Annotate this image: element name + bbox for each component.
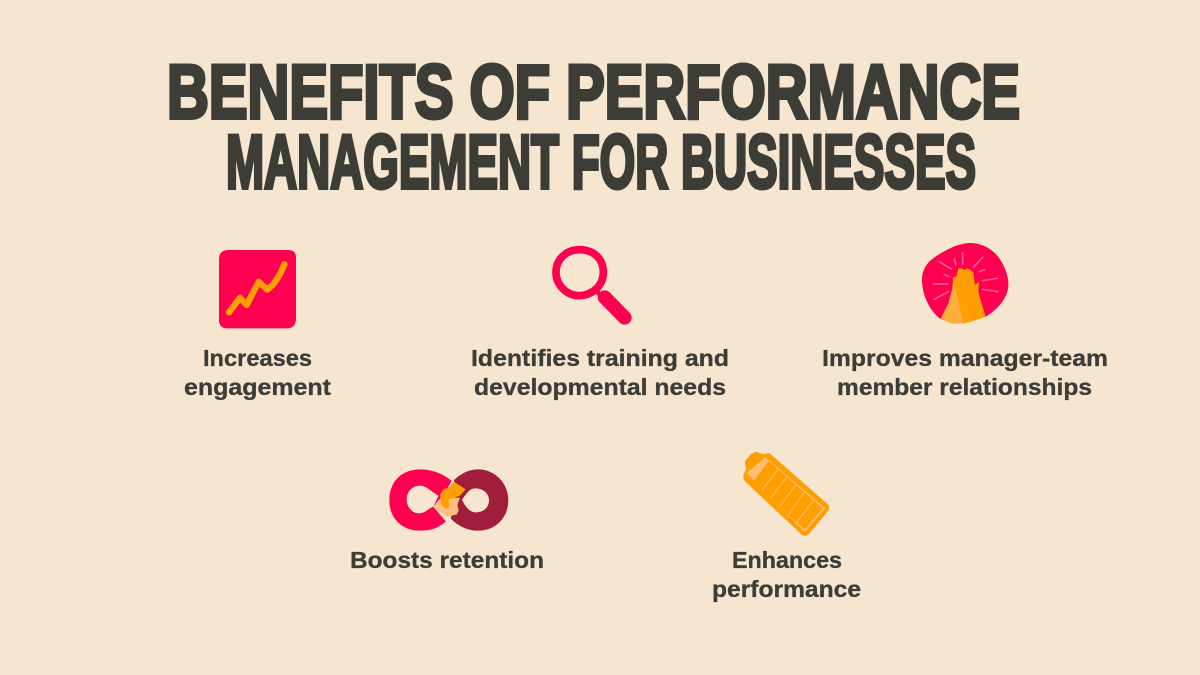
panel: improves manager-team member relationships — [822, 243, 1108, 400]
icon: rising line chart — [219, 250, 296, 328]
label: identifies training and developmental needs: developmental needs — [474, 374, 726, 400]
label: boosts retention: Boosts retention — [350, 547, 544, 573]
label: increases engagement: Increases — [203, 345, 312, 371]
label: increases engagement: engagement — [184, 374, 331, 400]
panel: boosts retention — [350, 469, 544, 573]
panel: enhances performance — [712, 452, 861, 602]
icon: battery — [743, 452, 829, 536]
panel: identifies training and developmental needs — [471, 250, 729, 400]
label: enhances performance — [712, 547, 861, 602]
label: improves manager-team member relationships: member relationships — [837, 374, 1092, 400]
icon: high five — [922, 243, 1008, 324]
label: improves manager-team member relationships — [822, 345, 1108, 400]
title — [167, 50, 1020, 205]
label: increases engagement — [184, 345, 331, 400]
label: identifies training and developmental needs: Identifies training and — [471, 345, 729, 371]
icon: infinity loop with fist — [389, 469, 508, 531]
label: enhances performance: Enhances — [732, 547, 842, 573]
label: improves manager-team member relationships: Improves manager-team — [822, 345, 1108, 371]
label: identifies training and developmental needs — [471, 345, 729, 400]
icon: magnifying glass — [556, 250, 625, 318]
label: enhances performance: performance — [712, 576, 861, 602]
panel: increases engagement — [184, 250, 331, 400]
